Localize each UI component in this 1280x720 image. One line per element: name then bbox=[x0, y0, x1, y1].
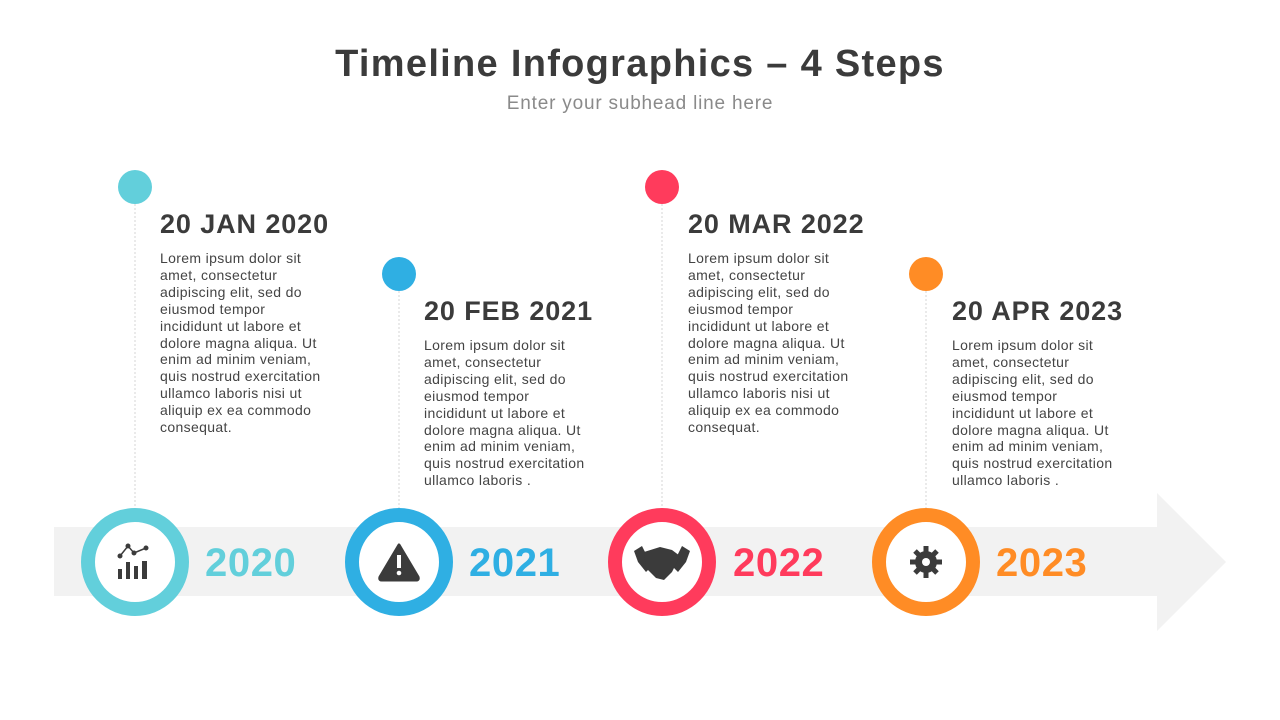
text: 20 APR 2023 bbox=[952, 296, 1123, 326]
text: amet, consectetur bbox=[688, 267, 805, 283]
text: ullamco laboris nisi ut bbox=[160, 385, 302, 401]
text: Lorem ipsum dolor sit bbox=[688, 250, 829, 266]
title: Timeline Infographics – 4 Steps bbox=[335, 43, 945, 85]
icon: warning bbox=[380, 545, 418, 580]
step 4 text bbox=[952, 296, 1123, 488]
text: amet, consectetur bbox=[952, 354, 1069, 370]
text: quis nostrud exercitation bbox=[424, 455, 585, 471]
marker dots bbox=[118, 170, 943, 291]
arrow band bbox=[54, 493, 1226, 631]
text: eiusmod tempor bbox=[952, 388, 1057, 404]
step 1 text bbox=[160, 209, 329, 435]
text: 2023 bbox=[996, 541, 1087, 585]
text: consequat. bbox=[688, 419, 760, 435]
text: 20 MAR 2022 bbox=[688, 209, 864, 239]
text: eiusmod tempor bbox=[424, 388, 529, 404]
text: Lorem ipsum dolor sit bbox=[424, 337, 565, 353]
text: incididunt ut labore et bbox=[952, 405, 1093, 421]
text: consequat. bbox=[160, 419, 232, 435]
text: dolore magna aliqua. Ut bbox=[952, 422, 1109, 438]
text: enim ad minim veniam, bbox=[424, 438, 575, 454]
text: enim ad minim veniam, bbox=[688, 351, 839, 367]
text: adipiscing elit, sed do bbox=[688, 284, 830, 300]
step 2 text bbox=[424, 296, 593, 488]
text: enim ad minim veniam, bbox=[160, 351, 311, 367]
text: ullamco laboris . bbox=[952, 472, 1059, 488]
icon: chart bbox=[118, 544, 148, 579]
text: amet, consectetur bbox=[160, 267, 277, 283]
ring circles bbox=[88, 515, 973, 609]
text: adipiscing elit, sed do bbox=[160, 284, 302, 300]
text: dolore magna aliqua. Ut bbox=[688, 335, 845, 351]
text: incididunt ut labore et bbox=[424, 405, 565, 421]
icon: handshake bbox=[634, 546, 690, 580]
year labels: 2020 bbox=[205, 541, 296, 585]
text: 2021 bbox=[469, 541, 560, 585]
text: aliquip ex ea commodo bbox=[160, 402, 311, 418]
text: ullamco laboris . bbox=[424, 472, 531, 488]
text: 2022 bbox=[733, 541, 824, 585]
text: Lorem ipsum dolor sit bbox=[160, 250, 301, 266]
text: 20 FEB 2021 bbox=[424, 296, 593, 326]
text: adipiscing elit, sed do bbox=[952, 371, 1094, 387]
text: ullamco laboris nisi ut bbox=[688, 385, 830, 401]
subhead: Enter your subhead line here bbox=[507, 93, 773, 114]
text: eiusmod tempor bbox=[688, 301, 793, 317]
text: eiusmod tempor bbox=[160, 301, 265, 317]
text: Lorem ipsum dolor sit bbox=[952, 337, 1093, 353]
text: dolore magna aliqua. Ut bbox=[160, 335, 317, 351]
text: incididunt ut labore et bbox=[688, 318, 829, 334]
text: aliquip ex ea commodo bbox=[688, 402, 839, 418]
text: amet, consectetur bbox=[424, 354, 541, 370]
text: 20 JAN 2020 bbox=[160, 209, 329, 239]
text: quis nostrud exercitation bbox=[160, 368, 321, 384]
icon: gear bbox=[910, 546, 942, 578]
text: enim ad minim veniam, bbox=[952, 438, 1103, 454]
text: incididunt ut labore et bbox=[160, 318, 301, 334]
text: dolore magna aliqua. Ut bbox=[424, 422, 581, 438]
text: adipiscing elit, sed do bbox=[424, 371, 566, 387]
text: quis nostrud exercitation bbox=[688, 368, 849, 384]
step 3 text bbox=[688, 209, 864, 435]
text: quis nostrud exercitation bbox=[952, 455, 1113, 471]
